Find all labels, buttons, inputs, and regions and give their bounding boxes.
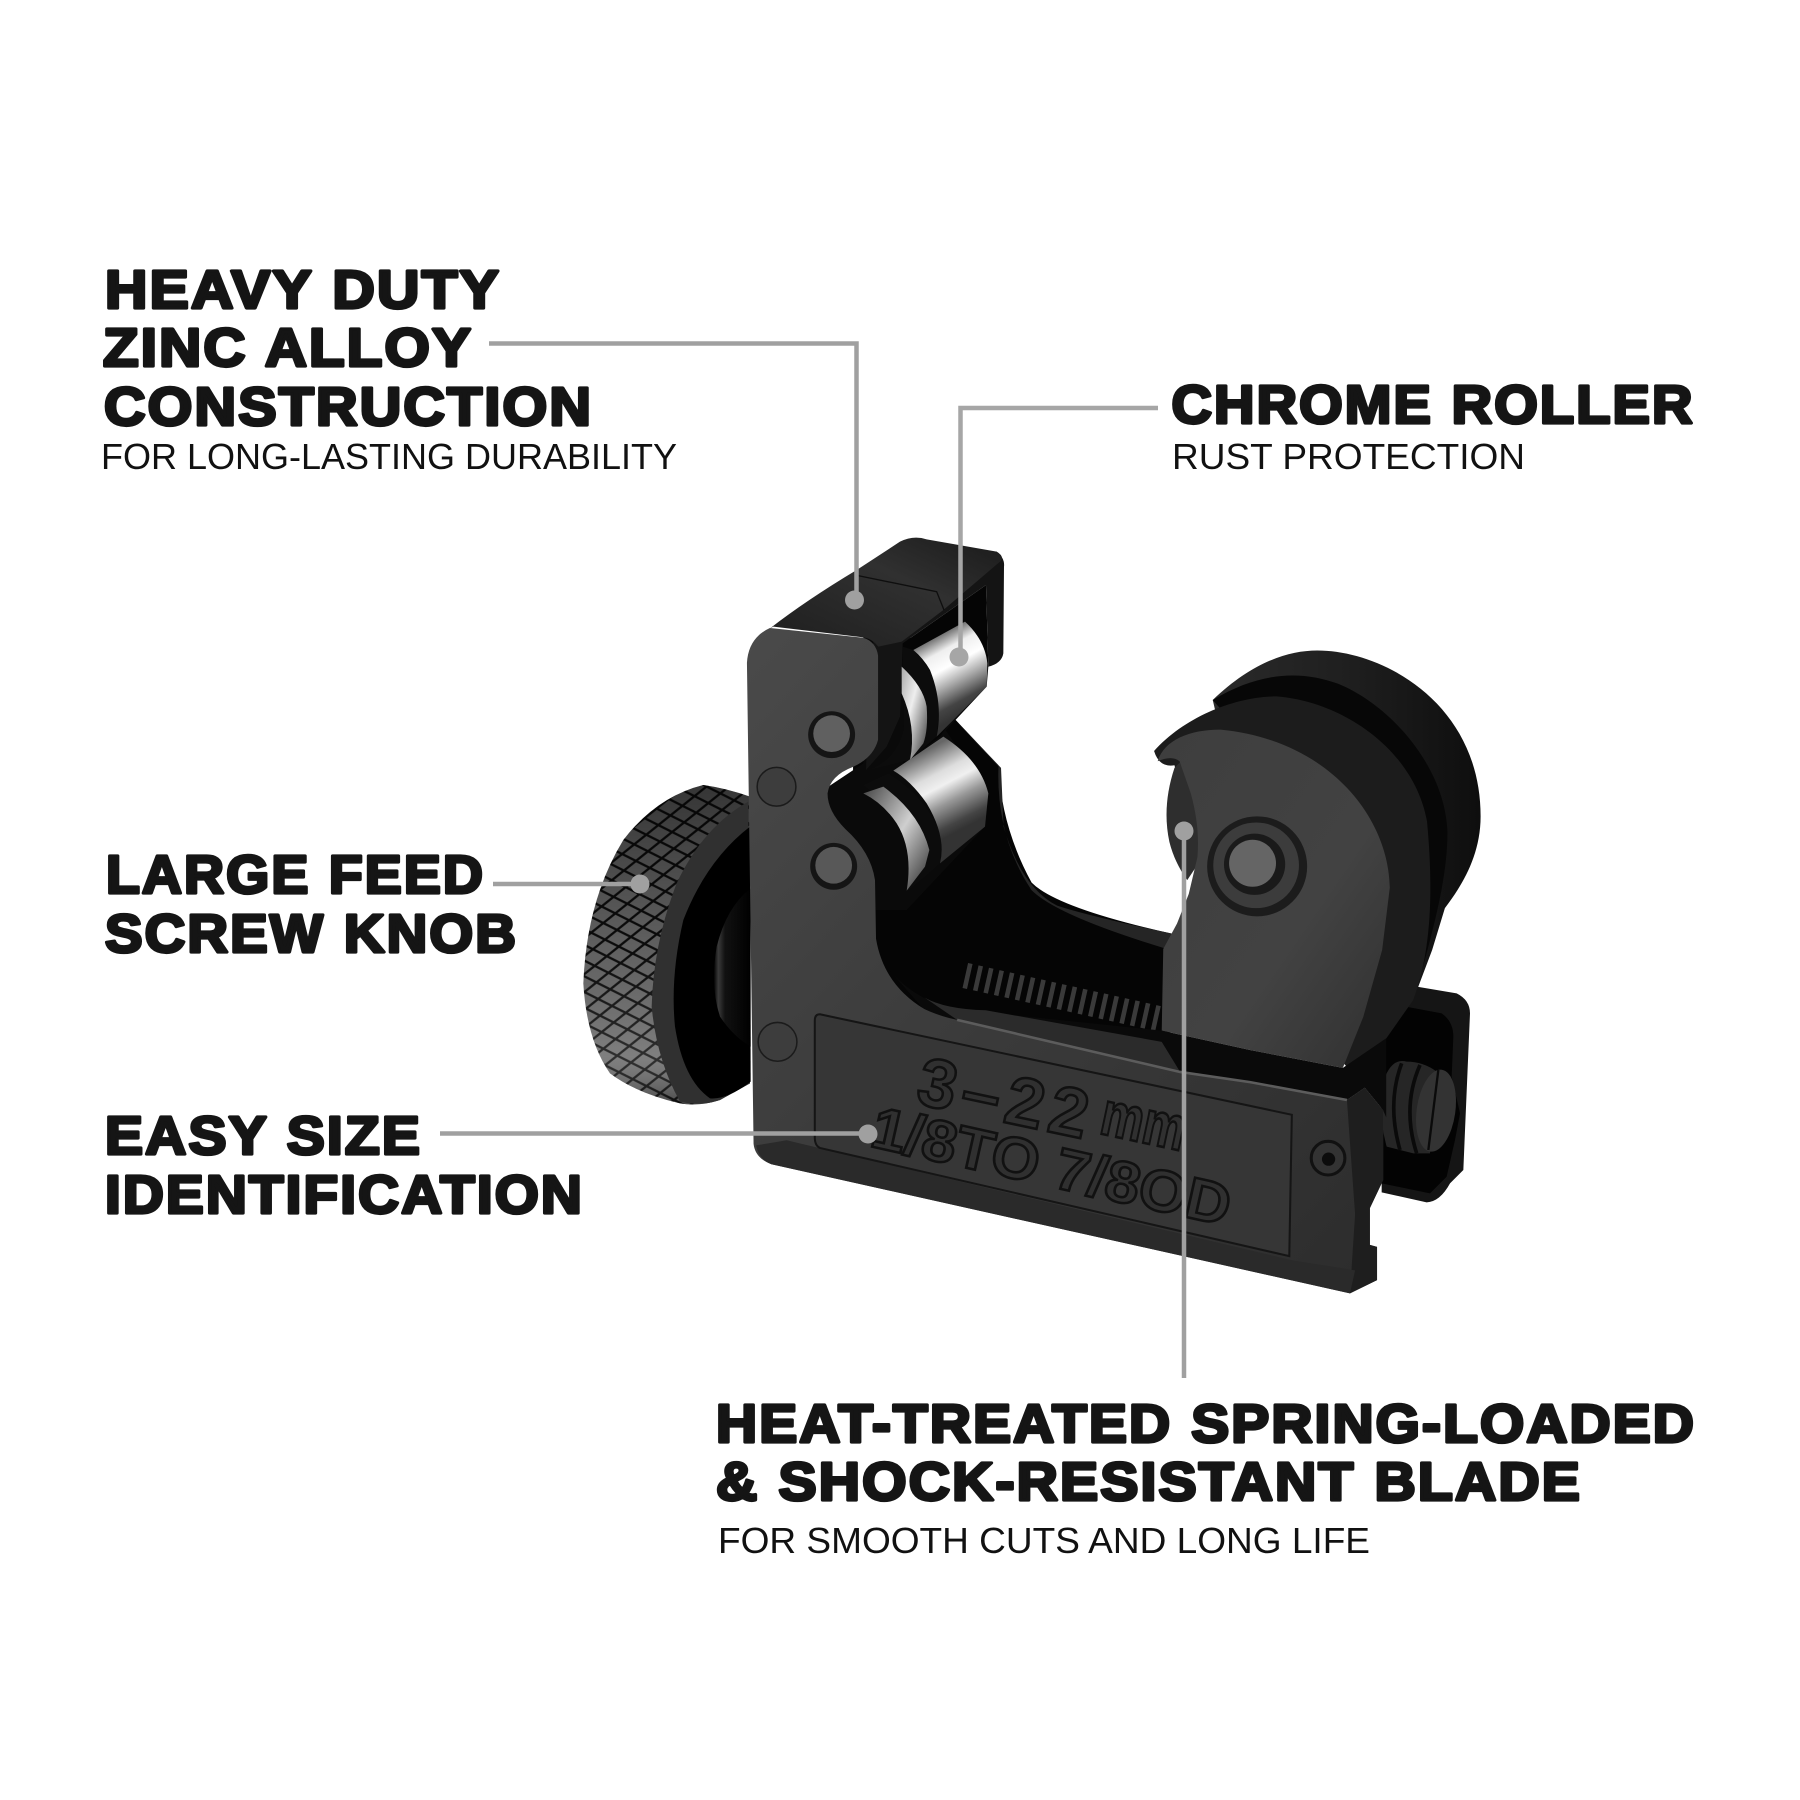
screw slot bbox=[1428, 1070, 1438, 1150]
embossed size marking bbox=[866, 1042, 1237, 1239]
lower chrome roller bbox=[893, 737, 988, 863]
knurled knob band bbox=[583, 785, 750, 1104]
embossed size marking: 3–22 bbox=[911, 1042, 1096, 1154]
embossed size marking: mm bbox=[1095, 1079, 1193, 1165]
lower roller neck bbox=[863, 787, 929, 891]
screw hole bbox=[1311, 1141, 1345, 1175]
callout line: feed screw knob bbox=[493, 874, 650, 894]
top chrome roller bbox=[913, 622, 987, 737]
screw end plate bbox=[1382, 987, 1470, 1202]
callout line: chrome roller bbox=[950, 408, 1158, 666]
body front face bbox=[747, 628, 1383, 1293]
heading: chrome roller bbox=[1172, 376, 1694, 477]
rear wheel shadow band bbox=[1213, 676, 1447, 990]
middle cutter rim bbox=[1154, 696, 1430, 1088]
heading: chrome roller: RUST PROTECTION bbox=[1172, 436, 1525, 477]
body lower lip bbox=[756, 1140, 1355, 1293]
body top edge highlight bbox=[957, 1020, 1347, 1100]
cap seam bbox=[855, 575, 944, 610]
thread grooves bbox=[1394, 1063, 1420, 1153]
heading: easy size identification: IDENTIFICATION bbox=[105, 1166, 584, 1225]
heading: heavy duty zinc alloy construction: FOR LONG-LASTING DURABILITY bbox=[101, 436, 677, 477]
heading: large feed screw knob bbox=[105, 846, 518, 964]
top roller neck bbox=[902, 667, 927, 760]
end plate opening bbox=[1382, 1005, 1460, 1193]
product: screw end assembly bbox=[1381, 987, 1470, 1202]
heading: large feed screw knob: LARGE FEED bbox=[106, 846, 485, 905]
heading: heavy duty zinc alloy construction: CONSTRUCTION bbox=[104, 378, 593, 437]
cutter pivot boss bbox=[1207, 816, 1307, 916]
product: frame cap and chrome rollers bbox=[770, 538, 1004, 910]
heading: heavy duty zinc alloy construction bbox=[101, 261, 677, 477]
embossed size marking: 1/8TO 7/8OD bbox=[866, 1095, 1237, 1239]
callout line: size identification bbox=[440, 1124, 878, 1144]
heading: heat-treated blade bbox=[716, 1395, 1696, 1561]
lower black rim bbox=[889, 969, 1386, 1117]
lower roller collar bbox=[863, 773, 942, 892]
heading: heat-treated blade: FOR SMOOTH CUTS AND LONG LIFE bbox=[718, 1520, 1370, 1561]
upper dimple bbox=[757, 767, 796, 806]
heading: heat-treated blade: HEAT-TREATED SPRING-LOADED bbox=[716, 1395, 1696, 1454]
product: tube cutter knob bbox=[583, 785, 751, 1104]
cap window bbox=[903, 585, 988, 763]
body right side band bbox=[1347, 1088, 1383, 1293]
heading: heavy duty zinc alloy construction: HEAVY DUTY bbox=[105, 261, 501, 320]
lower dimple bbox=[758, 1022, 797, 1061]
product: cutter wheels and rear frame bbox=[853, 651, 1481, 1056]
cutter pivot ring bbox=[1213, 822, 1299, 908]
cutter pivot pin bbox=[1224, 834, 1285, 895]
top roller black collar bbox=[867, 647, 940, 771]
heading: easy size identification bbox=[105, 1107, 584, 1225]
knob chamfer ring bbox=[652, 802, 750, 1104]
rear frame and U channel bbox=[853, 719, 1172, 1056]
knob neck bbox=[714, 888, 751, 1047]
rear frame edge bbox=[955, 720, 1172, 949]
callout line: blade bbox=[1174, 822, 1194, 1378]
knob inner face bbox=[674, 827, 751, 1098]
cutter front face bbox=[1158, 730, 1390, 1068]
heading: large feed screw knob: SCREW KNOB bbox=[105, 905, 518, 964]
cutter pivot face bbox=[1229, 840, 1276, 887]
roller backing shadow bbox=[823, 630, 988, 910]
blade crescent bbox=[1167, 760, 1203, 880]
heading: chrome roller: CHROME ROLLER bbox=[1172, 376, 1694, 435]
screw head bbox=[1411, 1067, 1461, 1154]
size plate outline bbox=[815, 1014, 1292, 1256]
lower pin bbox=[810, 843, 857, 890]
cap side frame bbox=[866, 552, 1004, 770]
top face of cap bbox=[770, 538, 1002, 647]
upper pin bbox=[808, 711, 855, 758]
heading: heavy duty zinc alloy construction: ZINC ALLOY bbox=[103, 319, 473, 378]
product: cutter and body front bbox=[747, 628, 1430, 1293]
knob shading bbox=[583, 785, 750, 1104]
rear cutter wheel bbox=[1213, 651, 1481, 1043]
callout line: zinc alloy bbox=[489, 344, 864, 610]
heading: easy size identification: EASY SIZE bbox=[105, 1107, 422, 1166]
heading: heat-treated blade: & SHOCK-RESISTANT BLADE bbox=[716, 1453, 1582, 1512]
body top lip band bbox=[924, 997, 1180, 1072]
spring bbox=[965, 976, 1162, 1019]
feed screw threads bbox=[1381, 1061, 1437, 1153]
